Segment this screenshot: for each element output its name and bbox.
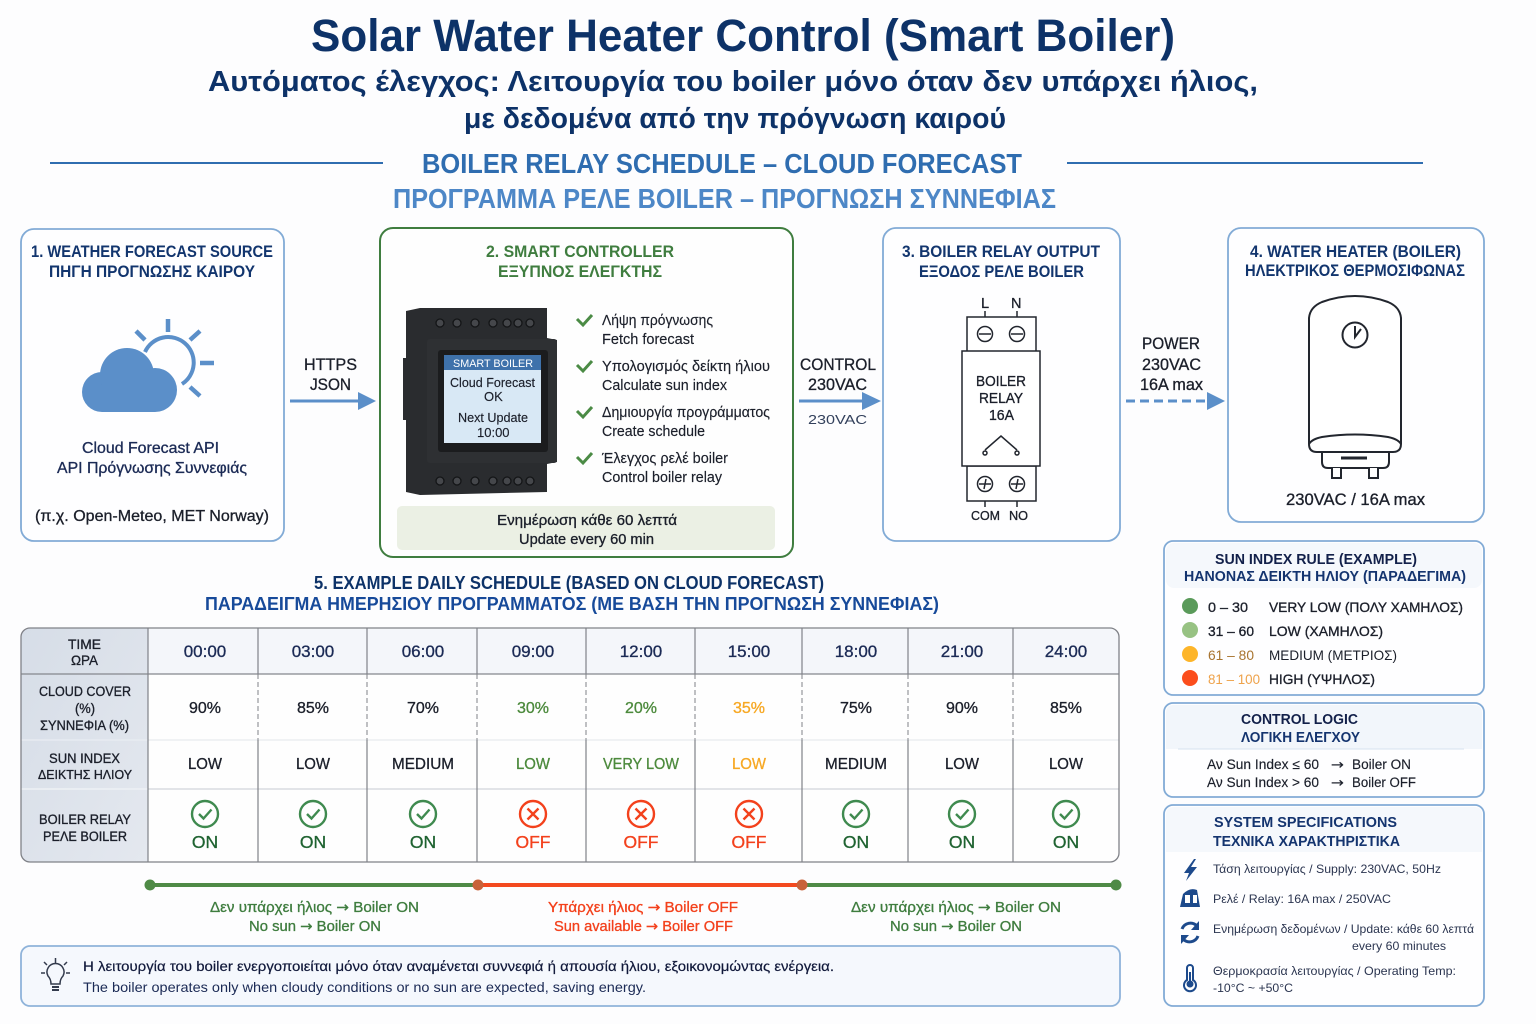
row: cloud cover: 85% — [297, 700, 329, 717]
icon: relay module: RELAY — [979, 391, 1023, 407]
arrow: control 230VAC: 230VAC — [808, 412, 867, 427]
row: sun index: LOW — [732, 756, 767, 773]
section heading: relay schedule: ΠΡΟΓΡΑΜΜΑ ΡΕΛΕ BOILER – ΠΡΟΓΝΩΣΗ ΣΥΝΝΕΦΙΑΣ — [393, 183, 1056, 214]
icon: relay module: L — [981, 296, 989, 312]
row: relay status text — [192, 832, 1079, 852]
icon: lightbulb — [41, 958, 70, 990]
text: temperature: Θερμοκρασία λειτουργίας / Operating Temp: — [1213, 964, 1456, 978]
arrow: power 230VAC — [1126, 335, 1225, 410]
heading: daily schedule: ΠΑΡΑΔΕΙΓΜΑ ΗΜΕΡΗΣΙΟΥ ΠΡΟΓΡΑΜΜΑΤΟΣ (ΜΕ ΒΑΣΗ ΤΗΝ ΠΡΟΓΝΩΣΗ ΣΥΝΝΕΦΙΑΣ) — [205, 594, 939, 614]
row: time: 06:00 — [402, 642, 444, 661]
arrow: power 230VAC: 230VAC — [1142, 356, 1201, 374]
heading: panel 3 — [902, 243, 1100, 281]
legend: very low: VERY LOW (ΠΟΛΥ ΧΑΜΗΛΟΣ) — [1269, 599, 1463, 615]
title: Solar Water Heater Control (Smart Boiler) — [311, 10, 1175, 61]
section heading: relay schedule: BOILER RELAY SCHEDULE – CLOUD FORECAST — [422, 148, 1022, 179]
screen: 10:00 — [477, 425, 510, 440]
row: cloud cover: 85% — [1050, 700, 1082, 717]
timeline label: no sun morning: No sun → Boiler ON — [249, 919, 381, 935]
heading: sun index rule: SUN INDEX RULE (EXAMPLE) — [1215, 552, 1417, 568]
row: cloud cover — [189, 700, 1082, 717]
row: relay status text: OFF — [624, 832, 658, 852]
checklist: Fetch forecast — [602, 332, 694, 348]
screen: Next Update — [458, 410, 528, 425]
row: sun index: LOW — [945, 756, 980, 773]
note text — [83, 958, 834, 995]
legend: medium: 61 – 80 — [1208, 647, 1254, 663]
text: update — [1213, 922, 1474, 953]
row: sun index: LOW — [296, 756, 331, 773]
legend: high: HIGH (ΥΨΗΛΟΣ) — [1269, 671, 1375, 687]
arrow: power 230VAC: POWER — [1142, 335, 1200, 353]
text: update: every 60 minutes — [1352, 939, 1446, 953]
timeline label: sun available: Sun available → Boiler OFF — [554, 919, 733, 935]
arrow: HTTPS JSON: JSON — [310, 375, 351, 394]
text: cloud forecast API — [57, 440, 247, 477]
row labels: TIME — [68, 636, 101, 652]
checklist: Calculate sun index — [602, 378, 728, 394]
checklist: Δημιουργία προγράμματος — [602, 405, 770, 421]
panel: water heater — [1228, 228, 1484, 522]
timeline label: sun available — [548, 900, 738, 935]
subtitle — [208, 66, 1258, 135]
row: relay status text: ON — [410, 832, 436, 852]
row: time: 15:00 — [728, 642, 770, 661]
timeline label: no sun morning: Δεν υπάρχει ήλιος → Boiler ON — [210, 900, 419, 916]
update bar: Update every 60 min — [519, 532, 654, 548]
row labels — [38, 636, 133, 844]
heading: panel 2 — [486, 243, 674, 281]
arrow: power 230VAC: 16A max — [1140, 376, 1204, 394]
row: time: 09:00 — [512, 642, 554, 661]
row labels: CLOUD COVER — [39, 684, 131, 699]
panel: weather forecast source — [21, 229, 284, 541]
row: cloud cover: 20% — [625, 700, 657, 717]
legend: high — [1182, 670, 1375, 687]
row: relay status text: ON — [300, 832, 326, 852]
heading: control logic: CONTROL LOGIC — [1241, 712, 1359, 728]
row: sun index: LOW — [1049, 756, 1084, 773]
section heading: relay schedule — [393, 148, 1056, 214]
heading: panel 4 — [1245, 243, 1465, 280]
timeline label: no sun evening: No sun → Boiler ON — [890, 919, 1022, 935]
checklist: Control boiler relay — [602, 470, 723, 486]
heading: panel 1 — [31, 243, 273, 281]
icon: thermometer — [1184, 965, 1196, 991]
legend: low: LOW (ΧΑΜΗΛΟΣ) — [1269, 623, 1383, 639]
row: time: 12:00 — [620, 642, 662, 661]
icon: relay module: N — [1011, 296, 1021, 312]
legend: very low: 0 – 30 — [1208, 599, 1248, 615]
panel: boiler relay output — [883, 228, 1120, 541]
heading: daily schedule — [205, 573, 939, 614]
icon: relay — [1180, 889, 1200, 907]
checklist: Έλεγχος ρελέ boiler — [601, 451, 728, 467]
row: cloud cover: 35% — [733, 700, 765, 717]
update bar — [397, 506, 775, 550]
logic rules: Boiler OFF — [1352, 775, 1416, 790]
note text: Η λειτουργία του boiler ενεργοποιείται μόνο όταν αναμένεται συννεφιά ή απουσία ήλιου, εξοικονομώντας ενέργεια. — [83, 958, 834, 974]
icon: relay module: BOILER — [976, 374, 1026, 390]
text: boiler rating: 230VAC / 16A max — [1286, 491, 1426, 509]
row: relay status icons — [192, 801, 1079, 827]
arrow: control 230VAC: 230VAC — [808, 375, 867, 394]
checklist: Create schedule — [602, 424, 705, 440]
checklist: Λήψη πρόγνωσης — [602, 313, 713, 329]
arrow: control 230VAC — [799, 355, 881, 427]
logic rules: → — [1331, 757, 1344, 773]
legend: medium: MEDIUM (ΜΕΤΡΙΟΣ) — [1269, 647, 1397, 663]
timeline label: no sun morning — [210, 900, 419, 935]
heading: panel 2: 2. SMART CONTROLLER — [486, 243, 674, 261]
screen: Cloud Forecast — [450, 375, 535, 390]
arrow: control 230VAC: CONTROL — [800, 355, 876, 374]
row: cloud cover: 75% — [840, 700, 872, 717]
screen — [444, 355, 541, 443]
row labels: SUN INDEX — [49, 751, 120, 766]
heading: specifications: ΤΕΧΝΙΚΑ ΧΑΡΑΚΤΗΡΙΣΤΙΚΑ — [1213, 833, 1400, 850]
heading: control logic: ΛΟΓΙΚΗ ΕΛΕΓΧΟΥ — [1241, 730, 1360, 746]
text: example providers: (π.χ. Open-Meteo, MET Norway) — [35, 508, 269, 525]
row: relay status text: ON — [1053, 832, 1079, 852]
icon: refresh — [1181, 921, 1199, 944]
icon: boiler tank — [1309, 296, 1401, 478]
update bar: Ενημέρωση κάθε 60 λεπτά — [497, 513, 677, 529]
timeline label: sun available: Υπάρχει ήλιος → Boiler OFF — [548, 900, 738, 916]
checklist — [577, 313, 770, 486]
logic rules — [1207, 757, 1416, 791]
row: time: 00:00 — [184, 642, 226, 661]
row: sun index: VERY LOW — [603, 756, 680, 773]
heading: specifications: SYSTEM SPECIFICATIONS — [1214, 814, 1397, 831]
icon: lightning bolt — [1184, 859, 1197, 881]
heading: panel 4: ΗΛΕΚΤΡΙΚΟΣ ΘΕΡΜΟΣΙΦΩΝΑΣ — [1245, 262, 1465, 280]
screen: OK — [484, 389, 503, 404]
timeline label: no sun evening — [851, 900, 1061, 935]
text: temperature — [1213, 964, 1456, 995]
row: cloud cover: 30% — [517, 700, 549, 717]
subtitle: Αυτόματος έλεγχος: Λειτουργία του boiler μόνο όταν δεν υπάρχει ήλιος, — [208, 66, 1258, 98]
row: relay status text: OFF — [516, 832, 550, 852]
row: time: 24:00 — [1045, 642, 1087, 661]
text: temperature: -10°C ~ +50°C — [1213, 981, 1293, 995]
logic rules: Αν Sun Index > 60 — [1207, 775, 1319, 790]
row: cloud cover: 90% — [946, 700, 978, 717]
row labels: BOILER RELAY — [39, 812, 131, 827]
schedule table — [21, 628, 1119, 862]
row: time: 21:00 — [941, 642, 983, 661]
timeline bar — [144, 880, 1122, 890]
heading: panel 4: 4. WATER HEATER (BOILER) — [1250, 243, 1461, 261]
icon: relay module: COM — [971, 508, 1000, 523]
legend: medium — [1182, 646, 1397, 663]
icon: DIN rail controller device — [403, 308, 557, 495]
row labels: ΔΕΙΚΤΗΣ ΗΛΙΟΥ — [38, 768, 133, 782]
row: cloud cover: 90% — [189, 700, 221, 717]
text: update: Ενημέρωση δεδομένων / Update: κάθε 60 λεπτά — [1213, 922, 1474, 936]
logic rules: Αν Sun Index ≤ 60 — [1207, 757, 1319, 772]
logic rules: → — [1331, 775, 1344, 791]
row labels: ΣΥΝΝΕΦΙΑ (%) — [40, 718, 129, 733]
heading: panel 2: ΕΞΥΠΝΟΣ ΕΛΕΓΚΤΗΣ — [498, 263, 662, 281]
note text: The boiler operates only when cloudy conditions or no sun are expected, saving energy. — [83, 979, 646, 995]
logic rules: Boiler ON — [1352, 757, 1411, 772]
heading: sun index rule: ΗΑΝΟΝΑΣ ΔΕΙΚΤΗ ΗΛΙΟΥ (ΠΑΡΑΔΕΓΙΜΑ) — [1184, 569, 1466, 585]
subtitle: με δεδομένα από την πρόγνωση καιρού — [464, 103, 1006, 135]
legend: low: 31 – 60 — [1208, 623, 1254, 639]
callout: energy saving note — [21, 946, 1120, 1006]
row: sun index — [188, 756, 1084, 773]
row labels: ΡΕΛΕ BOILER — [43, 829, 127, 844]
legend: high: 81 – 100 — [1208, 671, 1260, 687]
icon: relay module: NO — [1009, 508, 1028, 523]
text: cloud forecast API: API Πρόγνωσης Συννεφιάς — [57, 460, 247, 477]
row: sun index: LOW — [516, 756, 551, 773]
row: cloud cover: 70% — [407, 700, 439, 717]
arrow: HTTPS JSON: HTTPS — [304, 355, 357, 374]
checklist: Υπολογισμός δείκτη ήλιου — [602, 359, 770, 375]
row: relay status text: ON — [949, 832, 975, 852]
heading: panel 3: ΕΞΟΔΟΣ ΡΕΛΕ BOILER — [919, 263, 1084, 281]
row: relay status text: OFF — [732, 832, 766, 852]
text: cloud forecast API: Cloud Forecast API — [82, 440, 219, 457]
row: time: 18:00 — [835, 642, 877, 661]
row: sun index: MEDIUM — [392, 756, 454, 773]
row labels: ΩΡΑ — [71, 652, 99, 668]
panel: control logic — [1164, 703, 1484, 797]
timeline label: no sun evening: Δεν υπάρχει ήλιος → Boiler ON — [851, 900, 1061, 916]
icon: relay module — [962, 296, 1040, 523]
heading: control logic — [1241, 712, 1360, 746]
heading: panel 3: 3. BOILER RELAY OUTPUT — [902, 243, 1100, 261]
panel: system specifications — [1164, 805, 1484, 1006]
heading: daily schedule: 5. EXAMPLE DAILY SCHEDULE (BASED ON CLOUD FORECAST) — [314, 573, 824, 593]
legend: low — [1182, 622, 1383, 639]
heading: panel 1: 1. WEATHER FORECAST SOURCE — [31, 243, 273, 261]
text: supply: Τάση λειτουργίας / Supply: 230VAC, 50Hz — [1213, 862, 1441, 876]
screen: SMART BOILER — [453, 358, 533, 370]
arrow: HTTPS JSON — [290, 355, 376, 410]
heading: sun index rule — [1184, 552, 1466, 585]
heading: panel 1: ΠΗΓΗ ΠΡΟΓΝΩΣΗΣ ΚΑΙΡΟΥ — [49, 263, 255, 281]
row labels: (%) — [75, 701, 95, 716]
row: sun index: MEDIUM — [825, 756, 887, 773]
row: time: 03:00 — [292, 642, 334, 661]
row: sun index: LOW — [188, 756, 223, 773]
icon: cloud and sun — [82, 319, 214, 412]
row: relay status text: ON — [843, 832, 869, 852]
heading: specifications — [1213, 814, 1400, 850]
row: relay status text: ON — [192, 832, 218, 852]
icon: relay module: 16A — [989, 408, 1014, 424]
legend: very low — [1182, 598, 1463, 615]
panel: sun index rule — [1164, 541, 1484, 695]
text: relay: Ρελέ / Relay: 16A max / 250VAC — [1213, 892, 1391, 906]
panel: smart controller — [380, 228, 793, 557]
row: time — [184, 642, 1087, 661]
